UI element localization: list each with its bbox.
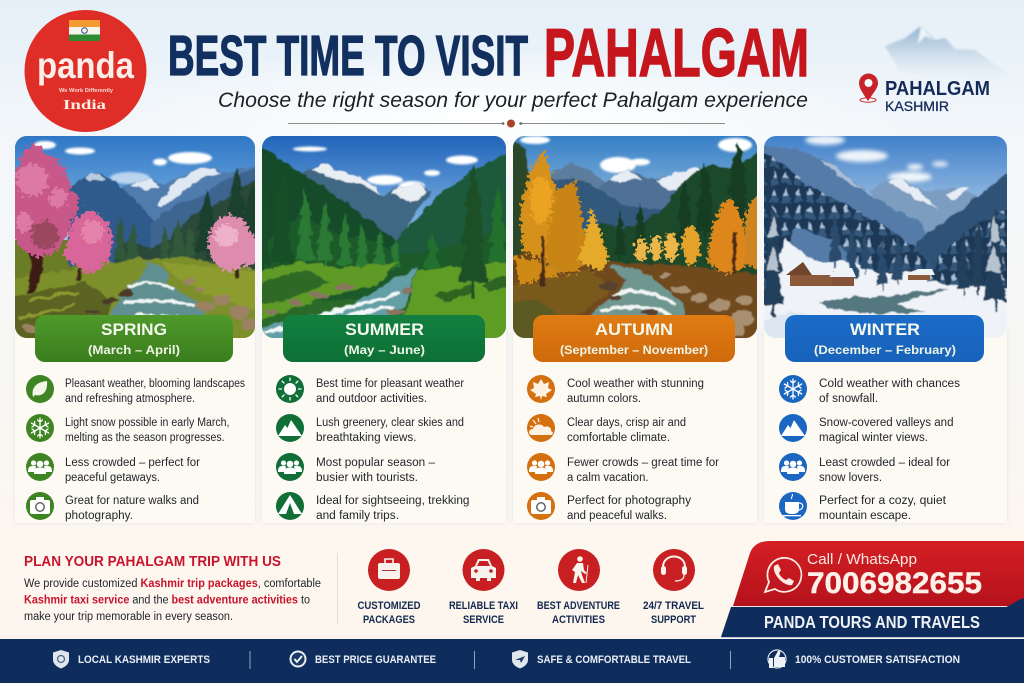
- list item: photography: Perfect for photography: [567, 495, 691, 507]
- heading: PLAN YOUR PAHALGAM TRIP WITH US: [24, 554, 281, 570]
- list item: crowds: a calm vacation.: [567, 472, 648, 484]
- season badge: [35, 315, 233, 362]
- list item: crowds: snow lovers.: [819, 472, 882, 484]
- feature text: BEST PRICE GUARANTEE: [315, 654, 436, 666]
- season badge: [283, 315, 485, 362]
- location tag: [859, 74, 990, 114]
- list item: climate: comfortable climate.: [567, 432, 670, 444]
- icon: check badge: [290, 650, 306, 668]
- faded mountain illustration: [885, 26, 1020, 84]
- list item: weather: Cool weather with stunning: [567, 378, 704, 390]
- service: travel support: SUPPORT: [651, 614, 696, 626]
- location tag: KASHMIR: [885, 98, 949, 114]
- list item: climate: [527, 414, 686, 444]
- list item: weather: [527, 375, 704, 405]
- list item: snow: melting as the season progresses.: [65, 432, 224, 444]
- trip planning text block: [24, 554, 321, 623]
- service: reliable taxi: RELIABLE TAXI: [449, 600, 518, 612]
- title: PAHALGAM: [544, 15, 809, 91]
- brand name: panda: [37, 45, 134, 86]
- list item: crowds: [276, 453, 436, 484]
- list item: trekking tent: Ideal for sightseeing, trekking: [316, 495, 470, 507]
- list item: trekking tent: and family trips.: [316, 510, 399, 522]
- list item: snow: Cold weather with chances: [819, 378, 960, 390]
- service: best adventure: BEST ADVENTURE: [537, 600, 620, 612]
- list item: crowds: Most popular season –: [316, 457, 436, 469]
- icon: Indian flag: [69, 20, 100, 41]
- footer bar: [0, 639, 1024, 683]
- paragraph: Kashmir taxi service and the best adventure activities to: [24, 594, 310, 606]
- image: autumn valley: [508, 130, 762, 345]
- list item: coffee cup: [779, 492, 947, 522]
- list item: crowds: [779, 453, 950, 484]
- season badge: (March – April): [88, 343, 180, 357]
- list item: snow: [26, 414, 230, 444]
- list item: weather: and outdoor activities.: [316, 393, 427, 405]
- list item: crowds: [527, 453, 719, 484]
- list item: weather: [26, 375, 245, 405]
- phone number: 7006982655: [807, 567, 982, 600]
- service: best adventure: ACTIVITIES: [552, 614, 605, 626]
- title: BEST TIME TO VISIT: [168, 24, 528, 88]
- service: customized packages: [358, 549, 421, 626]
- list item: weather: [276, 375, 464, 405]
- location tag: PAHALGAM: [885, 78, 990, 100]
- icon: shield with plane: [512, 650, 528, 668]
- feature text: 100% CUSTOMER SATISFACTION: [795, 654, 960, 666]
- season badge: WINTER: [850, 321, 920, 339]
- title divider: [288, 120, 725, 128]
- list item: snow: [779, 375, 960, 405]
- list item: climate: Clear days, crisp air and: [567, 417, 686, 429]
- list item: weather: autumn colors.: [567, 393, 641, 405]
- service: customized packages: PACKAGES: [363, 614, 415, 626]
- service: travel support: [643, 549, 704, 626]
- feature text: LOCAL KASHMIR EXPERTS: [78, 654, 210, 666]
- subtitle: Choose the right season for your perfect Pahalgam experience: [218, 89, 808, 112]
- list item: photography: photography.: [65, 510, 133, 522]
- service: reliable taxi: [449, 549, 518, 626]
- list item: crowds: [26, 453, 200, 484]
- list item: crowds: Least crowded – ideal for: [819, 457, 950, 469]
- list item: weather: Pleasant weather, blooming landscapes: [65, 378, 245, 390]
- paragraph: [24, 578, 321, 623]
- panel: autumn: [508, 130, 762, 523]
- logo: Panda India badge: [24, 10, 146, 132]
- list item: snow: Light snow possible in early March,: [65, 417, 230, 429]
- service: travel support: 24/7 TRAVEL: [643, 600, 704, 612]
- season badge: SUMMER: [345, 321, 424, 339]
- list item: views: [276, 414, 464, 444]
- service: customized packages: CUSTOMIZED: [358, 600, 421, 612]
- list item: crowds: busier with tourists.: [316, 472, 418, 484]
- icon: shield: [53, 650, 69, 668]
- list item: crowds: Fewer crowds – great time for: [567, 457, 719, 469]
- contact panel: [721, 541, 1024, 638]
- image: summer valley: [262, 136, 506, 338]
- list item: snow: of snowfall.: [819, 393, 878, 405]
- navy company block: [721, 598, 1024, 637]
- list item: photography: and peaceful walks.: [567, 510, 667, 522]
- list item: photography: [26, 492, 199, 522]
- list item: views: [779, 414, 954, 444]
- season badge: (September – November): [560, 343, 708, 357]
- list item: photography: [527, 492, 691, 522]
- season badge: (May – June): [344, 343, 425, 357]
- season badge: (December – February): [814, 343, 956, 357]
- panel: winter: [759, 130, 1012, 523]
- season badge: [533, 315, 735, 362]
- list item: coffee cup: mountain escape.: [819, 510, 911, 522]
- call label: Call / WhatsApp: [807, 551, 917, 568]
- icon: WhatsApp phone: [765, 558, 801, 592]
- list item: weather: Best time for pleasant weather: [316, 378, 464, 390]
- list item: views: Lush greenery, clear skies and: [316, 417, 464, 429]
- list item: photography: Great for nature walks and: [65, 495, 199, 507]
- icon: thumbs up: [768, 650, 786, 668]
- image: spring valley: [15, 136, 255, 338]
- list item: views: magical winter views.: [819, 432, 928, 444]
- list item: crowds: peaceful getaways.: [65, 472, 160, 484]
- image: winter valley: [759, 130, 1012, 345]
- season badge: SPRING: [101, 321, 167, 339]
- season badge: AUTUMN: [595, 321, 673, 339]
- panel: spring: [7, 130, 263, 523]
- service: reliable taxi: SERVICE: [463, 614, 504, 626]
- icon: map pin: [859, 74, 878, 102]
- list item: crowds: Less crowded – perfect for: [65, 457, 200, 469]
- paragraph: make your trip memorable in every season.: [24, 611, 233, 623]
- feature text: SAFE & COMFORTABLE TRAVEL: [537, 654, 691, 666]
- paragraph: We provide customized Kashmir trip packages, comfortable: [24, 578, 321, 590]
- tagline: We Work Differently: [59, 88, 113, 94]
- list item: coffee cup: Perfect for a cozy, quiet: [819, 495, 947, 507]
- list item: weather: and refreshing atmosphere.: [65, 393, 195, 405]
- company name: PANDA TOURS AND TRAVELS: [764, 612, 980, 632]
- list item: trekking tent: [276, 492, 470, 522]
- panel: summer: [252, 130, 511, 523]
- service: best adventure: [537, 549, 620, 626]
- list item: views: breathtaking views.: [316, 432, 416, 444]
- country: India: [63, 97, 106, 112]
- list item: views: Snow-covered valleys and: [819, 417, 954, 429]
- red call block: [733, 541, 1024, 606]
- season badge: [785, 315, 984, 362]
